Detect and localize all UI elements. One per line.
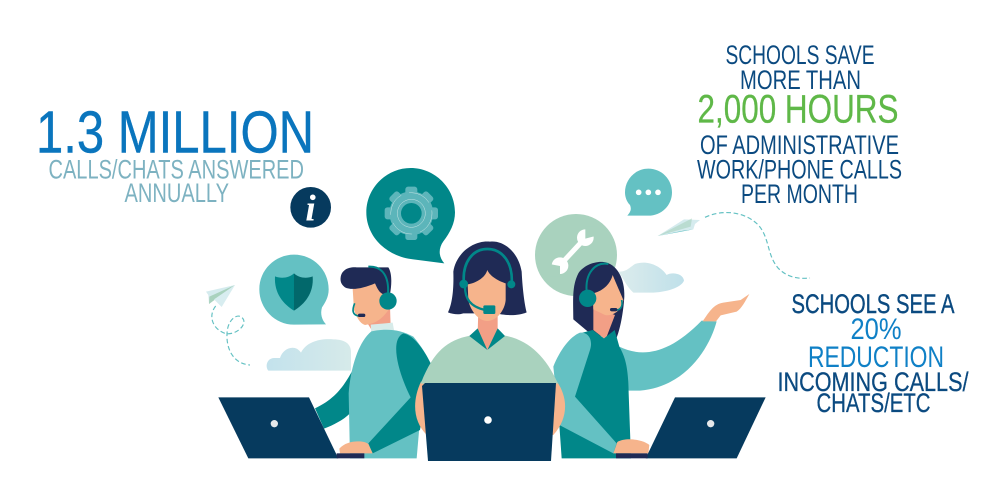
icon: right paper plane (658, 218, 700, 236)
right woman: torso (559, 330, 631, 458)
stat: 1.3 million calls answered: ANNUALLY (124, 178, 229, 208)
right woman: left arm (553, 333, 617, 453)
right woman: mic (615, 300, 622, 310)
man: neck (363, 307, 391, 330)
stat: schools save 2,000 hours (697, 40, 902, 209)
man: mic (353, 303, 359, 316)
illustration: right side icons and woman (535, 169, 810, 458)
stat: 20% reduction in incoming calls: 20% (850, 313, 902, 346)
man: face (353, 283, 391, 325)
stat: 1.3 million calls answered: 1.3 MILLION (36, 100, 314, 166)
stat: 20% reduction in incoming calls: REDUCTION (808, 341, 944, 374)
stat: schools save 2,000 hours: SCHOOLS SAVE (726, 40, 874, 70)
icon: left paper plane (206, 285, 235, 307)
man: back arm (315, 363, 357, 429)
center woman: hair (448, 242, 527, 315)
right woman: raised hand (703, 294, 749, 321)
illustration: center woman with headset (415, 242, 565, 435)
right woman: raised arm (619, 321, 717, 391)
man: earpiece (379, 292, 397, 310)
icon: left cloud (267, 339, 351, 371)
center laptop (422, 383, 556, 461)
center woman: face (468, 270, 506, 321)
stat: schools save 2,000 hours: MORE THAN (740, 65, 861, 95)
icon: info circle (290, 187, 331, 230)
right woman: hand (613, 439, 649, 453)
man: collar (371, 323, 394, 332)
icon: gear bubble (366, 168, 455, 263)
stat: 1.3 million calls answered (36, 100, 314, 208)
stat: schools save 2,000 hours: OF ADMINISTRATIVE (700, 130, 899, 160)
icon: info circle: i (305, 189, 316, 230)
right woman: earpiece (579, 290, 596, 307)
right woman: headset band (586, 264, 608, 292)
stat: 20% reduction in incoming calls (778, 289, 969, 418)
right woman: hair (573, 262, 624, 339)
icon: shield bubble (259, 255, 329, 325)
man with headset (315, 267, 431, 458)
man: hand (339, 441, 373, 453)
right woman: neck (593, 307, 615, 338)
woman on right with headset (553, 262, 749, 458)
man: headset band (368, 267, 388, 294)
stat: schools save 2,000 hours: 2,000 HOURS (698, 88, 898, 132)
illustration: left side icons and man (206, 168, 455, 458)
man: hair (341, 267, 391, 294)
stat: 1.3 million calls answered: CALLS/CHATS ANSWERED (48, 154, 304, 184)
icon: wrench bubble (535, 214, 617, 296)
stat: schools save 2,000 hours: WORK/PHONE CALLS (697, 154, 902, 184)
icon: chat dots bubble (625, 169, 672, 216)
right woman: face (593, 275, 623, 315)
icon: right cloud (618, 263, 684, 293)
center woman: headset band (464, 249, 512, 284)
stat: 20% reduction in incoming calls: CHATS/ETC (816, 388, 930, 418)
left laptop (218, 397, 364, 458)
center woman: ear pads (459, 280, 468, 288)
stat: schools save 2,000 hours: PER MONTH (741, 179, 858, 209)
center woman: arms (415, 382, 565, 435)
right laptop (616, 397, 766, 458)
center woman: shirt (421, 336, 558, 384)
center woman: neck (478, 312, 498, 350)
center woman: mic (465, 287, 495, 314)
center woman: collar (469, 328, 505, 350)
icon: right dashed trail (705, 213, 810, 278)
icon: left dashed trail (212, 306, 250, 365)
man: front arm (368, 333, 431, 453)
man: torso (349, 330, 431, 458)
